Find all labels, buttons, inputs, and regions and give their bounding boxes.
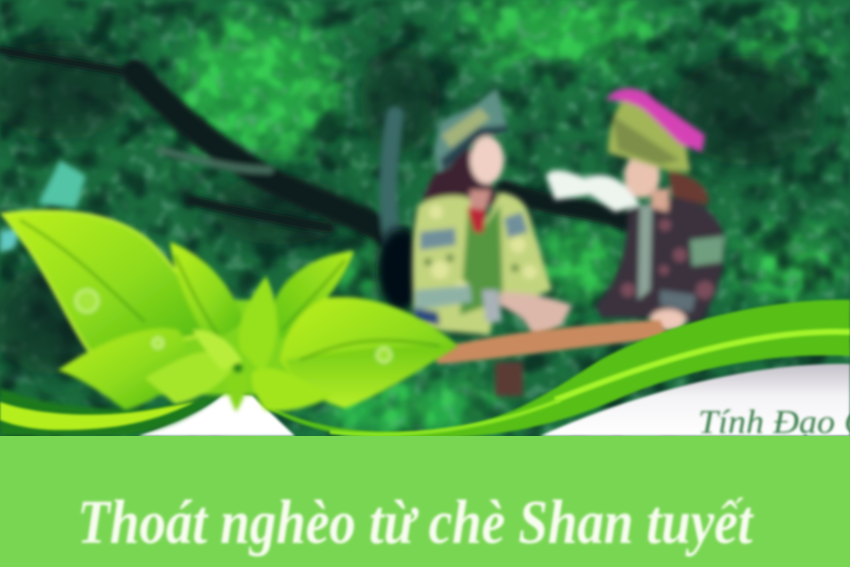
leaf: lower left xyxy=(58,328,186,410)
photo: woman on the right xyxy=(546,88,725,331)
jacket xyxy=(412,192,552,335)
leaf: bottom small xyxy=(226,374,248,412)
leaf: upper middle xyxy=(170,242,244,345)
face xyxy=(624,154,660,198)
hand xyxy=(650,309,686,331)
title strip xyxy=(0,436,850,567)
soft bright foliage regions xyxy=(175,0,835,430)
water drops xyxy=(76,290,391,362)
hat xyxy=(434,88,507,172)
leaf: lower middle xyxy=(145,352,232,404)
face and neck xyxy=(470,190,491,210)
leaf: right upper xyxy=(275,251,354,340)
white flowers xyxy=(546,170,640,212)
photo: legs below the tray xyxy=(495,362,523,396)
photo: wooden tray xyxy=(432,320,668,364)
leaf: large right xyxy=(280,297,458,408)
red collar xyxy=(467,206,487,233)
photo: woman on the left xyxy=(412,88,572,338)
leaf veins xyxy=(20,220,440,360)
title: Thoát nghèo từ chè Shan tuyết xyxy=(78,489,754,557)
hair xyxy=(422,150,505,215)
jacket xyxy=(596,197,725,322)
leaf: center upright xyxy=(239,276,277,374)
hat xyxy=(608,92,690,172)
arm and hands xyxy=(500,292,572,338)
leaf: small center xyxy=(193,330,242,370)
leaf: large left xyxy=(2,211,206,355)
leaf: lower right xyxy=(252,368,334,411)
white curved band behind swoosh xyxy=(138,364,850,436)
photo: tea forest background xyxy=(0,0,850,440)
leaf cluster base xyxy=(120,300,330,395)
tree trunk and branches xyxy=(0,50,630,240)
right green swoosh xyxy=(255,300,850,439)
tea leaves cluster xyxy=(2,211,458,412)
hair xyxy=(668,170,709,205)
dark shadow masses xyxy=(0,40,820,375)
sky patches xyxy=(38,160,86,208)
left green swoosh xyxy=(0,388,225,436)
